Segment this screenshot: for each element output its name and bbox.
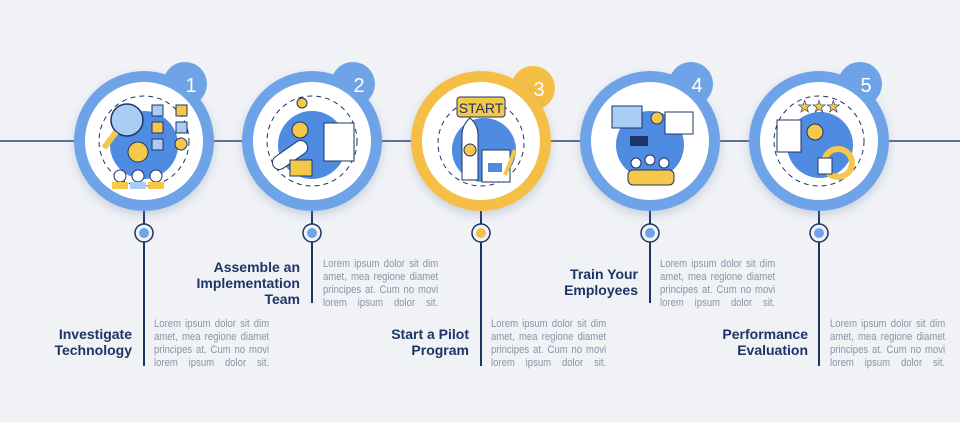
- title 3: [391, 326, 469, 358]
- text 4: amet,: [660, 271, 684, 283]
- text 4: movi: [755, 284, 775, 296]
- step 4 circle: 4: [691, 75, 703, 97]
- step 1 circle: 1: [185, 75, 197, 97]
- text 3: Lorem: [491, 318, 518, 330]
- text 3: dolor: [562, 357, 583, 369]
- text 3: sit.: [594, 357, 606, 369]
- text 2: ipsum: [354, 258, 380, 270]
- title 1: Investigate: [59, 326, 132, 342]
- text 5: ipsum: [861, 318, 887, 330]
- title 2: [197, 259, 300, 307]
- text 5: dim: [930, 318, 945, 330]
- text 5: principes: [830, 344, 868, 356]
- text 3: at.: [533, 344, 544, 356]
- text 2: dolor: [394, 297, 415, 309]
- text 5: [830, 318, 946, 369]
- step 2 circle: 2: [353, 75, 365, 97]
- text 4: at.: [702, 284, 713, 296]
- text 3: principes: [491, 344, 529, 356]
- text 3: amet,: [491, 331, 515, 343]
- step 5 circle: ★★★: [797, 97, 841, 116]
- text 3: regione: [542, 331, 573, 343]
- title 2: Team: [264, 291, 300, 307]
- text 3: movi: [586, 344, 606, 356]
- text 4: mea: [688, 271, 707, 283]
- title 5: Evaluation: [737, 342, 808, 358]
- text 5: mea: [858, 331, 877, 343]
- text 5: no: [911, 344, 921, 356]
- text 2: lorem: [323, 297, 347, 309]
- text 4: dolor: [721, 258, 742, 270]
- title 1: [54, 326, 132, 358]
- text 5: sit: [916, 318, 926, 330]
- title 5: [722, 326, 808, 358]
- text 5: regione: [881, 331, 912, 343]
- text 1: [154, 318, 270, 369]
- text 2: Cum: [380, 284, 400, 296]
- text 5: Cum: [887, 344, 907, 356]
- text 1: regione: [205, 331, 236, 343]
- text 1: Cum: [211, 344, 231, 356]
- text 1: sit.: [257, 357, 269, 369]
- text 5: ipsum: [865, 357, 890, 369]
- text 1: lorem: [154, 357, 178, 369]
- title 4: [564, 266, 638, 298]
- text 2: dolor: [384, 258, 405, 270]
- text 2: diamet: [410, 271, 438, 283]
- text 4: ipsum: [691, 258, 717, 270]
- text 4: dim: [760, 258, 775, 270]
- text 4: Lorem: [660, 258, 687, 270]
- text 4: no: [741, 284, 751, 296]
- text 2: dim: [423, 258, 438, 270]
- text 5: sit.: [933, 357, 945, 369]
- text 3: diamet: [578, 331, 606, 343]
- text 5: dolor: [891, 318, 912, 330]
- text 4: sit: [746, 258, 756, 270]
- text 4: dolor: [731, 297, 752, 309]
- title 3: Start a Pilot: [391, 326, 469, 342]
- text 2: movi: [418, 284, 438, 296]
- text 3: ipsum: [522, 318, 548, 330]
- text 2: [323, 258, 438, 309]
- text 1: dolor: [225, 357, 246, 369]
- text 2: at.: [365, 284, 376, 296]
- text 1: no: [235, 344, 245, 356]
- text 3: [491, 318, 606, 369]
- step 3 circle: [411, 66, 555, 366]
- text 2: principes: [323, 284, 361, 296]
- text 4: ipsum: [695, 297, 720, 309]
- text 1: dolor: [215, 318, 236, 330]
- step 2 circle: [242, 62, 382, 303]
- text 1: at.: [196, 344, 207, 356]
- text 2: no: [404, 284, 414, 296]
- text 2: ipsum: [358, 297, 383, 309]
- text 5: lorem: [830, 357, 854, 369]
- text 1: movi: [249, 344, 269, 356]
- title 2: Assemble an: [214, 259, 300, 275]
- text 3: no: [572, 344, 582, 356]
- text 5: movi: [925, 344, 945, 356]
- text 3: Cum: [548, 344, 568, 356]
- text 3: dolor: [552, 318, 573, 330]
- text 2: amet,: [323, 271, 347, 283]
- title 3: Program: [411, 342, 469, 358]
- text 2: sit: [409, 258, 419, 270]
- text 1: ipsum: [185, 318, 211, 330]
- text 4: regione: [711, 271, 742, 283]
- text 5: at.: [872, 344, 883, 356]
- text 4: [660, 258, 776, 309]
- text 1: amet,: [154, 331, 178, 343]
- text 2: sit.: [426, 297, 438, 309]
- text 4: lorem: [660, 297, 684, 309]
- text 3: ipsum: [526, 357, 551, 369]
- text 4: principes: [660, 284, 698, 296]
- text 2: regione: [374, 271, 405, 283]
- text 5: dolor: [901, 357, 922, 369]
- text 5: Lorem: [830, 318, 857, 330]
- text 5: diamet: [917, 331, 945, 343]
- text 5: amet,: [830, 331, 854, 343]
- text 3: dim: [591, 318, 606, 330]
- text 1: diamet: [241, 331, 269, 343]
- text 3: lorem: [491, 357, 515, 369]
- text 3: sit: [577, 318, 587, 330]
- title 5: Performance: [722, 326, 808, 342]
- step 4 circle: [580, 62, 720, 303]
- title 2: Implementation: [197, 275, 300, 291]
- text 1: ipsum: [189, 357, 214, 369]
- text 4: Cum: [717, 284, 737, 296]
- text 4: diamet: [747, 271, 775, 283]
- step 5 circle: [749, 62, 889, 366]
- title 4: Train Your: [570, 266, 638, 282]
- text 1: sit: [240, 318, 250, 330]
- text 2: Lorem: [323, 258, 350, 270]
- step 3 circle: 3: [533, 79, 545, 101]
- step 5 circle: 5: [860, 75, 872, 97]
- step 3 circle: START: [459, 100, 504, 116]
- text 2: mea: [351, 271, 370, 283]
- text 1: mea: [182, 331, 201, 343]
- text 4: sit.: [763, 297, 775, 309]
- title 1: Technology: [54, 342, 132, 358]
- text 1: principes: [154, 344, 192, 356]
- title 4: Employees: [564, 282, 638, 298]
- text 3: mea: [519, 331, 538, 343]
- step 1 circle: [74, 62, 214, 366]
- text 1: dim: [254, 318, 269, 330]
- text 1: Lorem: [154, 318, 181, 330]
